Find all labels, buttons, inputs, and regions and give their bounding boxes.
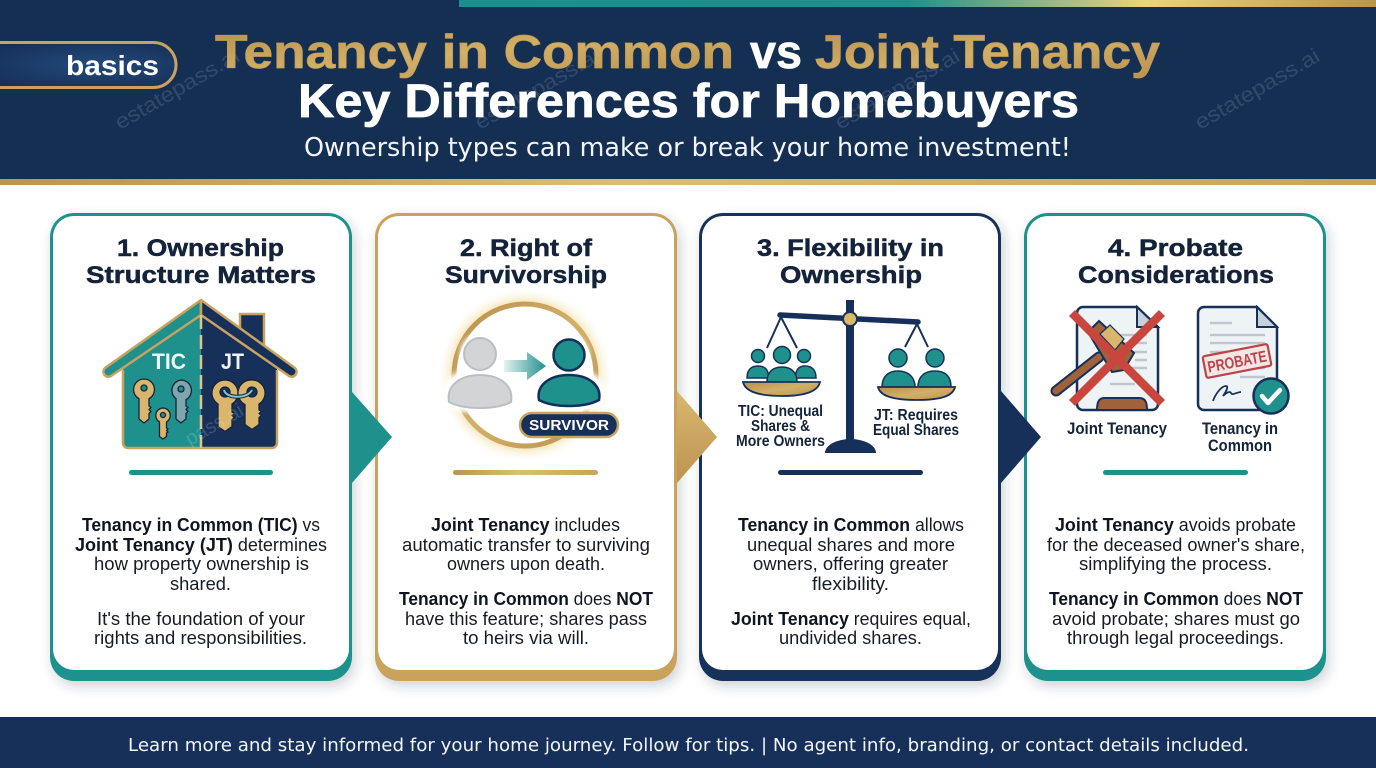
heading bbox=[445, 235, 607, 289]
text block bbox=[399, 514, 654, 648]
panel: ownership structure bbox=[50, 213, 352, 681]
divider bbox=[778, 470, 923, 475]
text block bbox=[1047, 514, 1305, 648]
text block: Tenancy in Common does NOT bbox=[399, 588, 654, 609]
label: tenancy in common: Tenancy in bbox=[1202, 420, 1278, 438]
top accent bar bbox=[459, 0, 1376, 7]
owners: left pan bbox=[747, 346, 816, 382]
text block: Tenancy in Common does NOT bbox=[1049, 588, 1304, 609]
icon: split house with keys bbox=[103, 300, 297, 450]
icon: gavel crossed out bbox=[1056, 307, 1162, 410]
icon: split house with keys: TIC bbox=[152, 349, 186, 374]
text block: shared. bbox=[170, 573, 231, 594]
text block: Joint Tenancy (JT) determines bbox=[75, 534, 327, 555]
text block: for the deceased owner's share, bbox=[1047, 534, 1305, 555]
text block: Joint Tenancy requires equal, bbox=[731, 608, 971, 629]
watermarks: estatepass.ai bbox=[111, 44, 244, 134]
text block: automatic transfer to surviving bbox=[402, 534, 650, 555]
person: grey bbox=[449, 338, 511, 408]
arrow: step 2 to 3 bbox=[677, 391, 717, 483]
watermark on house: pass.ai bbox=[182, 400, 247, 450]
text block: Joint Tenancy avoids probate bbox=[1055, 514, 1296, 535]
heading: Ownership bbox=[780, 262, 922, 289]
label: TIC: More Owners bbox=[736, 433, 825, 450]
heading: Survivorship bbox=[445, 262, 607, 289]
heading: Considerations bbox=[1078, 262, 1274, 289]
title: Joint Tenancy bbox=[815, 25, 1160, 78]
panel: right of survivorship bbox=[375, 213, 677, 681]
text block: rights and responsibilities. bbox=[94, 627, 307, 648]
badge: survivor: SURVIVOR bbox=[529, 417, 609, 434]
footer: Learn more and stay informed for your home journey. Follow for tips. | No agent info, branding, or contact details included. bbox=[128, 735, 1249, 756]
heading: 3. Flexibility in bbox=[757, 235, 944, 262]
text block: simplifying the process. bbox=[1079, 553, 1272, 574]
text block: have this feature; shares pass bbox=[405, 608, 647, 629]
owners: right pan bbox=[882, 349, 951, 387]
watermarks: estatepass.ai bbox=[1191, 44, 1324, 134]
text block: how property ownership is bbox=[94, 553, 309, 574]
label: tenancy in common: Common bbox=[1208, 437, 1272, 455]
panel: probate bbox=[1024, 213, 1326, 681]
label: TIC: TIC: Unequal bbox=[738, 403, 823, 420]
text block: flexibility. bbox=[812, 573, 889, 594]
icon: blue-grey key bbox=[172, 380, 191, 423]
icon: balance scale bbox=[736, 300, 959, 453]
icon: linked gold keys bbox=[212, 380, 238, 432]
stamp: PROBATE bbox=[1206, 348, 1269, 377]
label: JT: Equal Shares bbox=[873, 422, 959, 439]
text block: unequal shares and more bbox=[747, 534, 955, 555]
watermarks bbox=[111, 44, 1324, 134]
panel: flexibility bbox=[699, 213, 1001, 681]
text block bbox=[75, 514, 327, 648]
divider bbox=[1103, 470, 1248, 475]
label: tenancy in common bbox=[1202, 420, 1278, 455]
badge: survivor bbox=[520, 413, 618, 437]
text block: owners upon death. bbox=[447, 553, 605, 574]
title: Tenancy in Common bbox=[215, 25, 734, 78]
person: survivor bbox=[539, 340, 599, 406]
text block bbox=[731, 514, 971, 648]
label: JT bbox=[873, 407, 959, 439]
arrow: step 1 to 2 bbox=[352, 392, 392, 483]
subtitle: Ownership types can make or break your home investment! bbox=[304, 133, 1071, 163]
label: TIC: Shares & bbox=[751, 418, 810, 435]
watermarks: estatepass.ai bbox=[831, 44, 964, 134]
text block: undivided shares. bbox=[779, 627, 922, 648]
heading: 4. Probate bbox=[1108, 235, 1243, 262]
signature bbox=[1213, 386, 1241, 401]
heading: 2. Right of bbox=[460, 235, 593, 262]
text block: It's the foundation of your bbox=[97, 608, 305, 629]
label: joint tenancy: Joint Tenancy bbox=[1067, 420, 1168, 438]
title: vs bbox=[750, 25, 802, 78]
badge: basics: basics bbox=[66, 50, 159, 81]
arrow: transfer bbox=[504, 352, 546, 380]
icon: probate document bbox=[1198, 307, 1288, 414]
text block: Tenancy in Common (TIC) vs bbox=[82, 514, 320, 535]
heading: 1. Ownership bbox=[117, 235, 284, 262]
divider bbox=[453, 470, 598, 475]
heading bbox=[1078, 235, 1274, 289]
watermarks: estatepass.ai bbox=[471, 44, 604, 134]
text block: owners, offering greater bbox=[753, 553, 948, 574]
icon: split house with keys: JT bbox=[221, 349, 244, 374]
text block: through legal proceedings. bbox=[1067, 627, 1284, 648]
divider bbox=[129, 470, 273, 475]
arrow: step 3 to 4 bbox=[1001, 391, 1041, 483]
heading: Structure Matters bbox=[86, 262, 316, 289]
title bbox=[215, 25, 1160, 127]
label: JT: JT: Requires bbox=[874, 407, 958, 424]
heading bbox=[86, 235, 316, 289]
text block: to heirs via will. bbox=[463, 627, 589, 648]
check mark bbox=[1254, 378, 1288, 414]
icon: survivor transfer bbox=[437, 287, 618, 463]
text block: avoid probate; shares must go bbox=[1052, 608, 1300, 629]
heading bbox=[757, 235, 944, 289]
icon: small gold key bbox=[156, 408, 170, 439]
badge: basics bbox=[0, 42, 176, 88]
title: Key Differences for Homebuyers bbox=[298, 74, 1079, 127]
header gold rule bbox=[0, 179, 1376, 185]
red cross bbox=[1072, 313, 1162, 403]
footer bbox=[0, 717, 1376, 768]
header banner bbox=[0, 0, 1376, 179]
text block: Tenancy in Common allows bbox=[738, 514, 964, 535]
label: TIC bbox=[736, 403, 825, 450]
icon: gold key bbox=[134, 379, 154, 423]
text block: Joint Tenancy includes bbox=[431, 514, 620, 535]
